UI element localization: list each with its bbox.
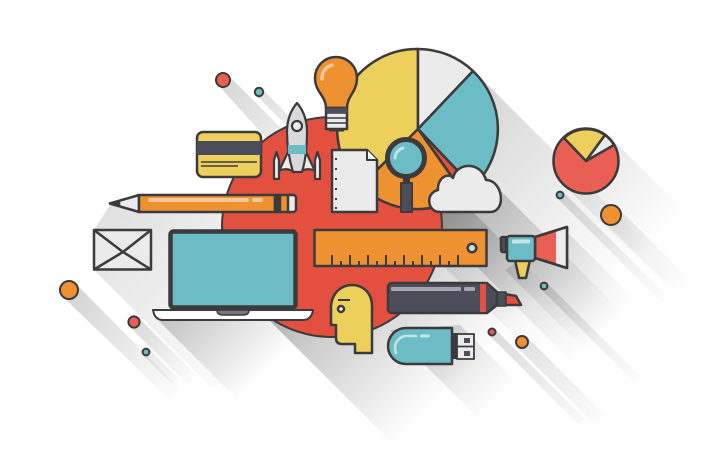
icon: laptop	[153, 232, 313, 320]
icon: cloud	[429, 166, 501, 212]
icon: megaphone	[501, 227, 567, 278]
icon: usb drive	[388, 328, 474, 364]
decorative dots	[60, 73, 621, 355]
icon: marker	[388, 283, 521, 313]
big pie chart	[337, 49, 498, 209]
icon: document	[332, 150, 377, 212]
long diagonal shadows	[62, 72, 695, 445]
icon: magnifier	[388, 140, 424, 212]
red background circle	[222, 117, 442, 337]
icon: pencil	[110, 195, 296, 212]
icon: rocket	[274, 103, 320, 179]
small pie chart	[554, 128, 618, 194]
icon: credit card	[197, 132, 261, 177]
icon: light bulb	[315, 57, 357, 132]
icon: ruler	[314, 230, 486, 266]
icon: envelope	[94, 230, 151, 270]
icon: head profile	[331, 285, 372, 353]
